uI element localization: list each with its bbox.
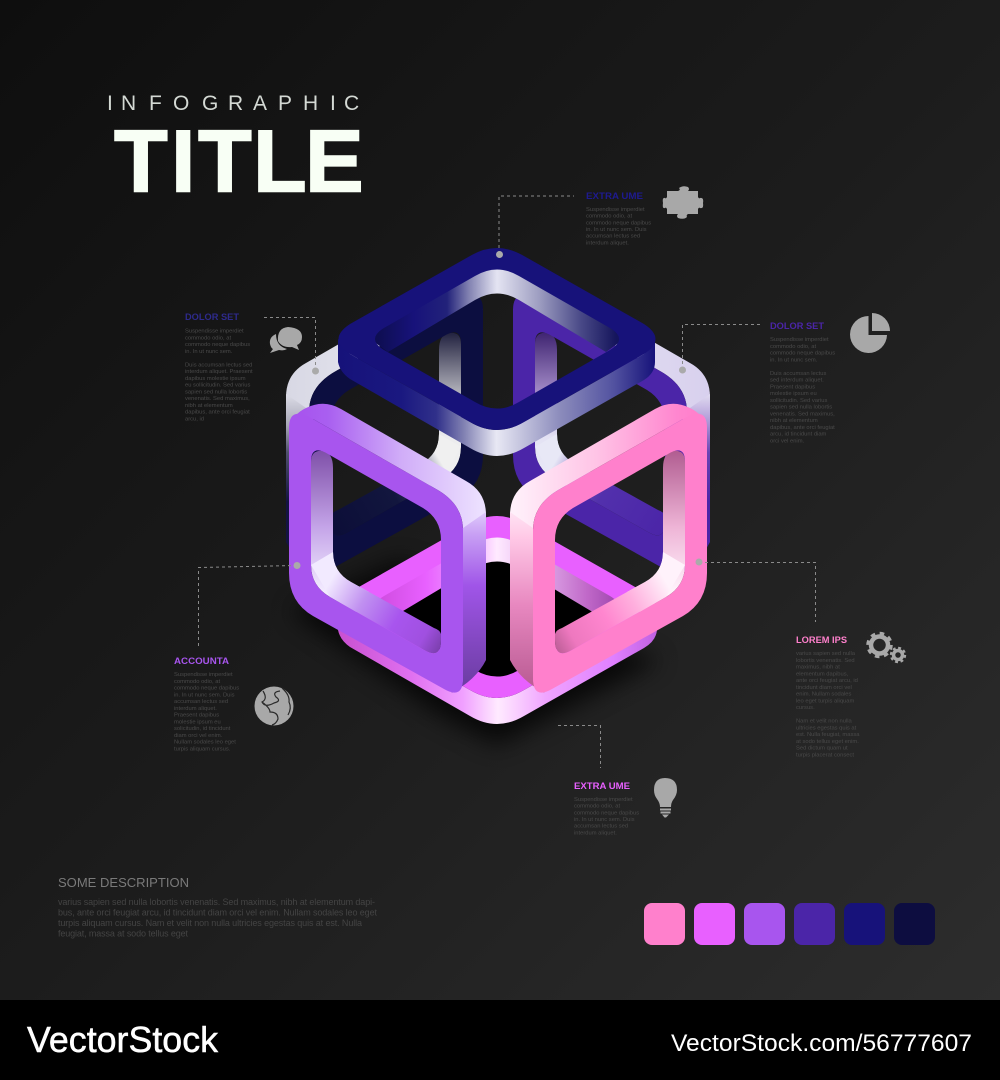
watermark logo: VectorStock [27, 1019, 219, 1060]
text block: lower left accounta: in. In ut nunc sem. Duis [174, 692, 235, 698]
icon: gears [868, 634, 905, 662]
text block: top extra ume: Suspendisse imperdiet [586, 207, 645, 213]
description block: turpis aliquam cursus. Nam et velit non nulla ultricies egestas quis at est. Nulla [58, 918, 362, 928]
text block: lower left accounta: commodo neque dapibus [174, 686, 239, 692]
text block: lower right lorem ips: leo eget turpis aliquam [796, 698, 854, 704]
colour swatches [644, 903, 935, 945]
text block: lower right lorem ips: maximus, nibh at [796, 664, 840, 670]
text block: lower left accounta: ACCOUNTA [174, 656, 230, 666]
text block: bottom extra ume: EXTRA UME [574, 781, 630, 791]
watermark url: VectorStock.com/56777607 [671, 1030, 972, 1057]
text block: upper right dolor set: dapibus, ante orci feugiat [770, 425, 835, 431]
text block: top extra ume: commodo neque dapibus [586, 220, 651, 226]
text block: upper left dolor set: Suspendisse imperdiet [185, 328, 244, 334]
text block: bottom extra ume: interdum aliquet. [574, 830, 617, 836]
text block: lower right lorem ips: cursus. [796, 705, 815, 711]
text block: upper left dolor set [185, 312, 253, 422]
back right frame [513, 286, 710, 575]
description block [58, 875, 377, 938]
text block: upper right dolor set: arcu, id tincidunt diam [770, 432, 827, 438]
icon: globe [254, 686, 294, 726]
text block: lower right lorem ips [796, 635, 860, 758]
text block: upper right dolor set: orci vel enim. [770, 438, 805, 444]
text block: upper right dolor set: Duis accumsan lectus [770, 371, 826, 377]
text block: upper right dolor set: Praesent dapibus [770, 384, 815, 390]
text block: lower right lorem ips: varius sapien sed nulla [796, 651, 856, 657]
text block: upper right dolor set: molestie ipsum eu [770, 391, 817, 397]
text block: upper right dolor set: in. In ut nunc sem. [770, 357, 818, 363]
text block: lower right lorem ips: turpis placerat consect [796, 752, 854, 758]
text block: upper left dolor set: venenatis. Sed maximus, [185, 396, 250, 402]
text block: top extra ume: commodo odio, at [586, 214, 632, 220]
text block: upper left dolor set: commodo neque dapibus [185, 342, 250, 348]
text block: lower right lorem ips: elementum dapibus, [796, 671, 849, 677]
text block: upper left dolor set: interdum aliquet. Praesent [185, 369, 253, 375]
text block: upper right dolor set [770, 321, 835, 444]
text block: upper right dolor set: DOLOR SET [770, 321, 825, 331]
connector: bottom [558, 726, 600, 768]
text block: upper right dolor set: Suspendisse imperdiet [770, 337, 829, 343]
text block: bottom extra ume: accumsan lectus sed [574, 824, 628, 830]
text block: lower right lorem ips: at sodo tellus eget enim. [796, 739, 859, 745]
text block: lower left accounta: Suspendisse imperdiet [174, 672, 233, 678]
connector: top [496, 196, 574, 258]
text block: upper left dolor set: in. In ut nunc sem. [185, 349, 233, 355]
text block: upper right dolor set: sollicitudin. Sed varius [770, 398, 827, 404]
text block: upper right dolor set: commodo neque dapibus [770, 350, 835, 356]
bottom frame [338, 516, 657, 724]
text block: lower left accounta: turpis aliquam cursus. [174, 746, 231, 752]
text block: lower right lorem ips: LOREM IPS [796, 635, 847, 645]
connector: upper right [679, 324, 762, 374]
text block: upper right dolor set: sapien sed nulla lobortis [770, 404, 832, 410]
text block: lower left accounta: accumsan lectus sed [174, 699, 228, 705]
icon: pie chart [850, 313, 890, 353]
title: TITLE [114, 112, 364, 210]
text block: lower left accounta: molestie ipsum eu [174, 719, 221, 725]
text block: lower right lorem ips: enim. Nullam sodales [796, 692, 852, 698]
text block: top extra ume: accumsan lectus sed [586, 234, 640, 240]
text block: upper left dolor set: Duis accumsan lectus sed [185, 362, 252, 368]
icon: chat bubbles [270, 327, 302, 353]
cube shadow [290, 560, 660, 745]
icon: puzzle [663, 186, 703, 219]
text block: upper left dolor set: dapibus molestie ipsum [185, 376, 246, 382]
text block: upper left dolor set: nibh at elementum [185, 403, 233, 409]
text block: upper left dolor set: sapien sed nulla lobortis [185, 389, 247, 395]
connector: upper left [261, 318, 319, 374]
footer bar [0, 1000, 1000, 1080]
text block: upper left dolor set: eu sollicitudin. Sed varius [185, 382, 251, 388]
text block: bottom extra ume: commodo neque dapibus [574, 810, 639, 816]
title: INFOGRAPHIC [107, 92, 359, 115]
text block: lower right lorem ips: lobortis venenatis. Sed [796, 658, 855, 664]
connector: right [696, 558, 816, 622]
isometric cube [286, 248, 710, 724]
text block: top extra ume: EXTRA UME [586, 191, 643, 201]
text block: bottom extra ume: Suspendisse imperdiet [574, 797, 633, 803]
back left frame [286, 286, 483, 575]
text block: bottom extra ume: in. In ut nunc sem. Duis [574, 817, 635, 823]
description block: bus, ante orci feugiat arcu, id tincidunt diam orci vel enim. Nullam sodales leo eget [58, 907, 377, 917]
text block: lower left accounta: commodo odio, at [174, 679, 220, 685]
text block: lower right lorem ips: tincidunt diam orci vel [796, 685, 852, 691]
description block: varius sapien sed nulla lobortis venenatis. Sed maximus, nibh at elementum dapi- [58, 897, 375, 907]
text block: lower left accounta: Nullam sodales leo eget [174, 740, 236, 746]
description block: feugiat, massa at sodo tellus eget [58, 928, 188, 938]
text block: bottom extra ume [574, 781, 639, 836]
text block: upper left dolor set: DOLOR SET [185, 312, 240, 322]
text block: lower right lorem ips: ante orci feugiat arcu, id [796, 678, 858, 684]
top frame [338, 248, 656, 456]
text block: upper right dolor set: sed interdum aliquet. [770, 378, 824, 384]
text block: lower right lorem ips: Nam et velit non nulla [796, 718, 853, 724]
text block: upper left dolor set: arcu, id [185, 416, 204, 422]
front left purple frame [289, 404, 486, 693]
text block: top extra ume: interdum aliquet. [586, 240, 629, 246]
text block: upper left dolor set: commodo odio, at [185, 335, 231, 341]
description block: SOME DESCRIPTION [58, 875, 189, 890]
text block: top extra ume [586, 191, 651, 246]
text block: lower left accounta: interdum aliquet. [174, 706, 217, 712]
text block: upper right dolor set: venenatis. Sed maximus, [770, 411, 835, 417]
text block: lower left accounta: Praesent dapibus [174, 712, 219, 718]
text block: top extra ume: in. In ut nunc sem. Duis [586, 227, 647, 233]
text block: lower right lorem ips: Sed dictum quam ut [796, 746, 848, 752]
text block: upper right dolor set: commodo odio, at [770, 344, 816, 350]
text block: upper right dolor set: nibh at elementum [770, 418, 818, 424]
text block: bottom extra ume: commodo odio, at [574, 804, 620, 810]
front right pink frame [510, 404, 707, 693]
text block: upper left dolor set: dapibus, ante orci feugiat [185, 410, 250, 416]
connector: left [198, 562, 300, 648]
text block: lower right lorem ips: est. Nulla feugiat, massa [796, 732, 860, 738]
text block: lower left accounta: solicitudin, id tincidunt [174, 726, 231, 732]
icon: light bulb [654, 778, 677, 818]
text block: lower right lorem ips: ultricies egestas quis at [796, 725, 857, 731]
text block: lower left accounta [174, 656, 239, 752]
text block: lower left accounta: diam orci vel enim. [174, 733, 223, 739]
